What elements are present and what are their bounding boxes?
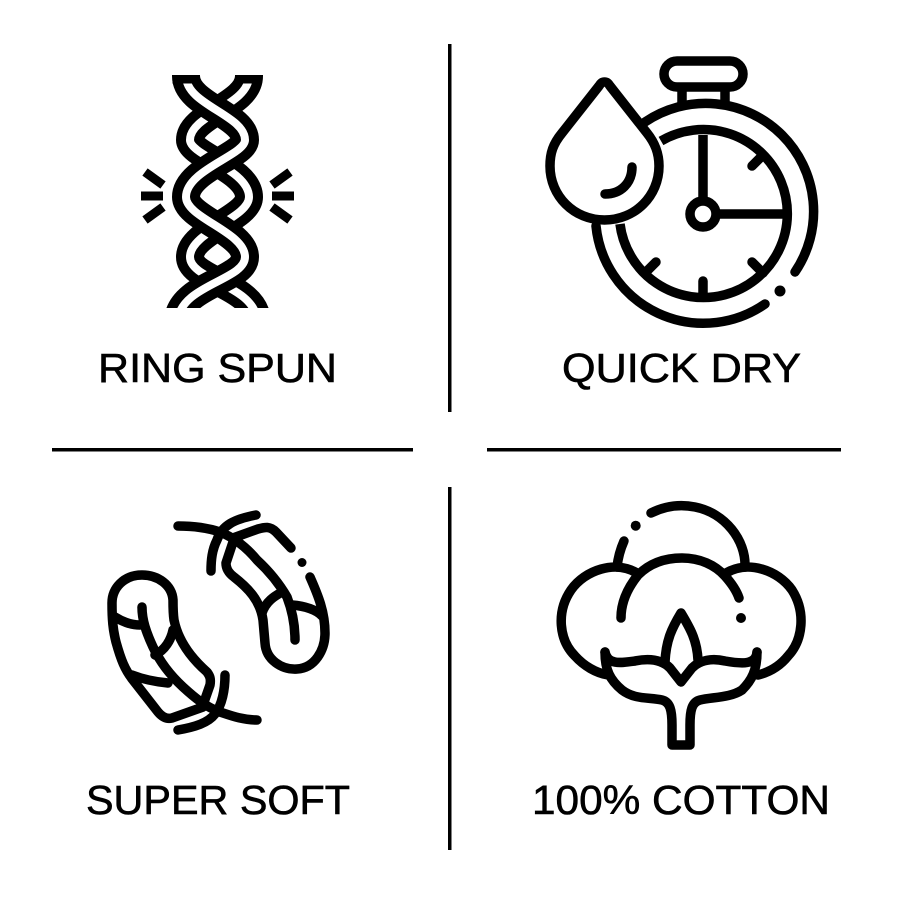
panel: 100% cotton — [532, 506, 830, 823]
icon: cotton boll — [561, 506, 801, 745]
icon: twisted yarn — [141, 75, 294, 308]
label: super soft: SUPER SOFT — [86, 777, 350, 823]
divider: bottom vertical — [448, 487, 452, 850]
icon: stopwatch with water drop — [550, 61, 814, 323]
panel: quick dry — [550, 61, 814, 391]
label: ring spun: RING SPUN — [98, 345, 337, 391]
panel: super soft — [86, 515, 350, 823]
divider: right horizontal — [487, 448, 841, 452]
label: quick dry: QUICK DRY — [562, 345, 801, 391]
divider: left horizontal — [52, 448, 413, 452]
panel: ring spun — [98, 60, 337, 391]
icon: two feathers — [112, 515, 325, 730]
label: 100% cotton: 100% COTTON — [532, 777, 830, 823]
divider: top vertical — [448, 44, 452, 412]
